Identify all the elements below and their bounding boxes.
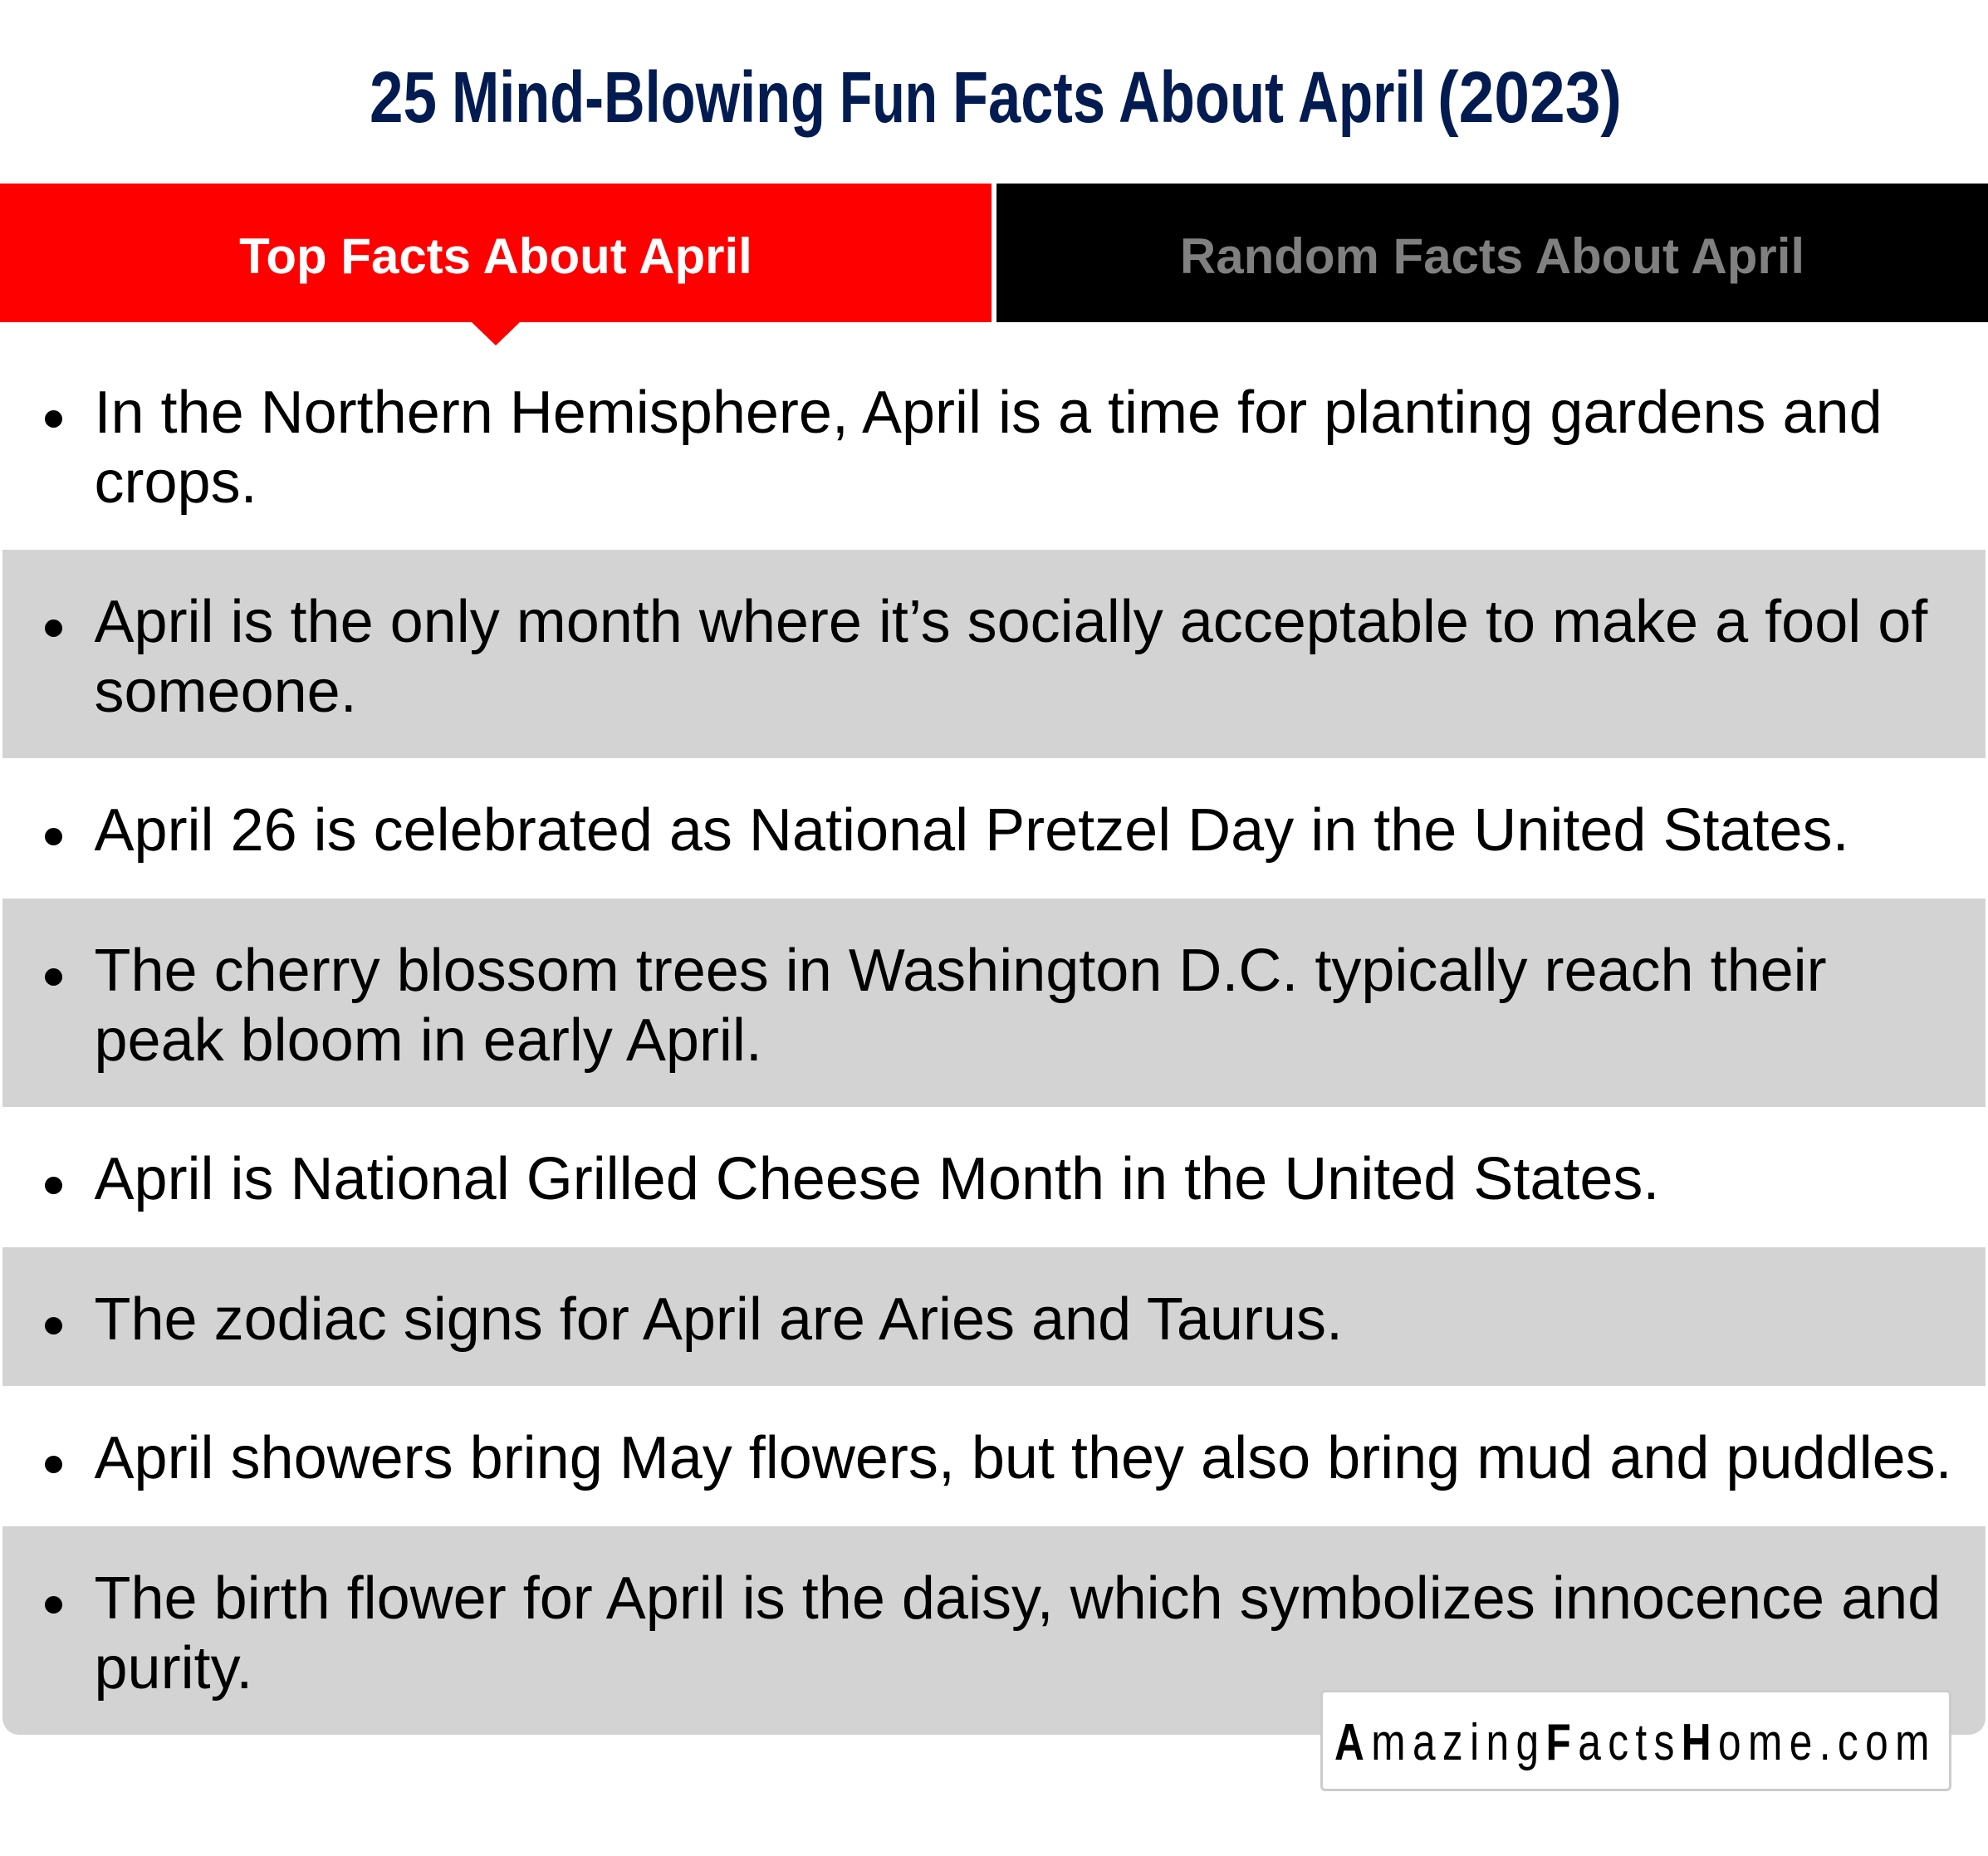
fact row 1: [45, 380, 1883, 516]
fact row 1: In the Northern Hemisphere, April is a time for planting gardens and: [95, 380, 1883, 446]
title: 25: [370, 57, 437, 138]
fact row 2: [2, 550, 1986, 758]
title: Facts: [952, 57, 1105, 138]
fact row 1: crops.: [95, 449, 257, 516]
fact row 8: purity.: [95, 1635, 252, 1702]
fact row 6: The zodiac signs for April are Aries and Taurus.: [95, 1286, 1343, 1353]
tab: random facts: Random Facts About April: [1180, 228, 1804, 284]
fact row 4: [2, 899, 1986, 1107]
fact row 8: [2, 1526, 1986, 1735]
fact row 6: [2, 1247, 1986, 1386]
fact row 4: The cherry blossom trees in Washington D.C. typically reach their: [95, 938, 1827, 1004]
fact row 4: peak bloom in early April.: [95, 1007, 762, 1074]
tab: top facts: Top Facts About April: [239, 228, 752, 284]
title: Fun: [840, 57, 938, 138]
fact row 2: April is the only month where it’s socially acceptable to make a fool of: [95, 589, 1927, 655]
tab: top facts: [0, 184, 992, 322]
fact row 8: The birth flower for April is the daisy, which symbolizes innocence and: [95, 1565, 1941, 1632]
fact row 5: April is National Grilled Cheese Month in the United States.: [95, 1146, 1659, 1212]
fact row 7: April showers bring May flowers, but they also bring mud and puddles.: [95, 1425, 1952, 1491]
title: (2023): [1437, 57, 1622, 138]
title: [370, 57, 1622, 138]
title: Mind-Blowing: [452, 57, 825, 138]
watermark badge: AmazingFactsHome.com: [1334, 1714, 1937, 1771]
fact row 2: someone.: [95, 659, 357, 725]
tab: random facts: [996, 184, 1988, 322]
watermark badge: [1320, 1690, 1951, 1791]
title: About: [1119, 57, 1284, 138]
fact row 3: April 26 is celebrated as National Pretzel Day in the United States.: [95, 797, 1849, 864]
title: April: [1298, 57, 1426, 138]
icon: tab pointer arrow: [472, 322, 520, 345]
